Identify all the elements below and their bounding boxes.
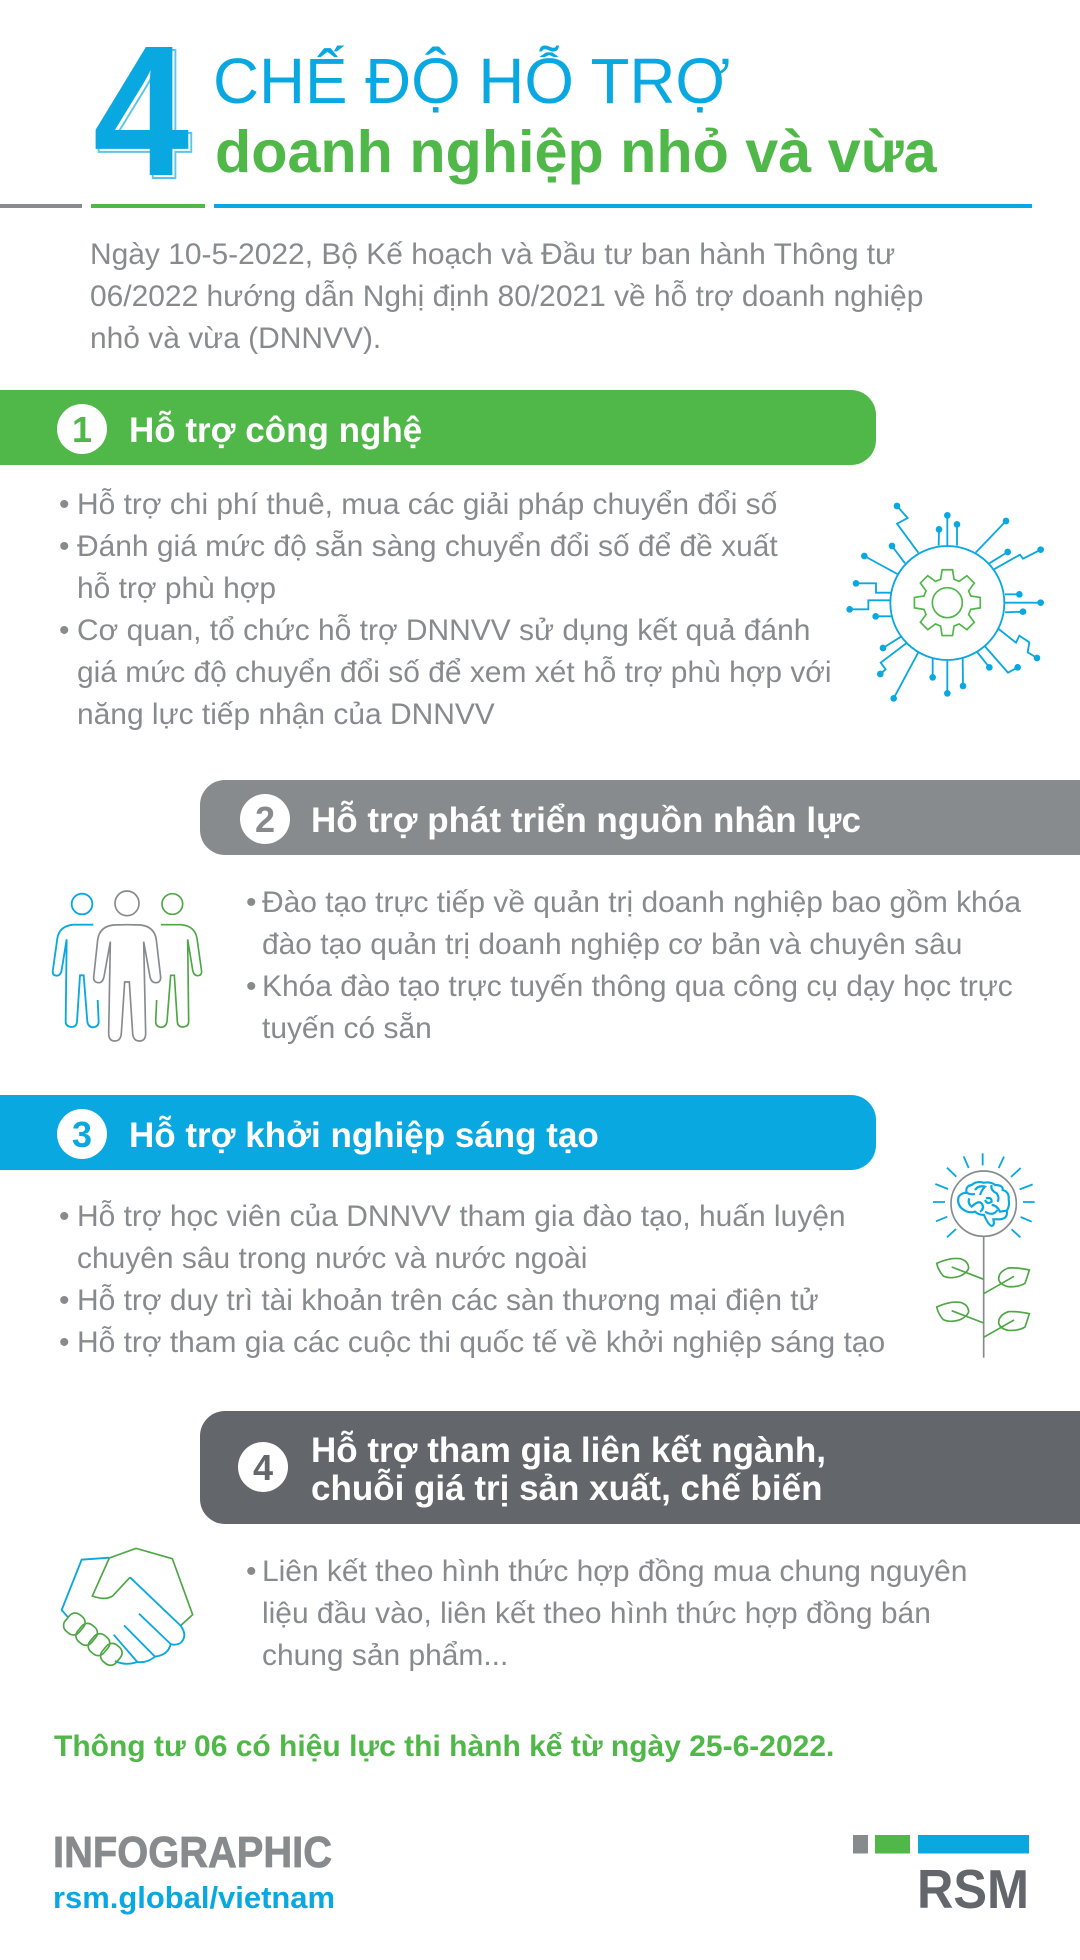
section 1 bullet list: năng lực tiếp nhận của DNNVV xyxy=(77,698,495,731)
icon: brain flower xyxy=(933,1153,1035,1358)
intro text: 06/2022 hướng dẫn Nghị định 80/2021 về hỗ trợ doanh nghiệp xyxy=(90,280,923,313)
section 3 bullet list: • xyxy=(59,1200,69,1233)
section 1 bullet list xyxy=(59,488,832,731)
section 2 bullet list: Khóa đào tạo trực tuyến thông qua công cụ dạy học trực xyxy=(262,970,1013,1003)
section 2 bullet list: • xyxy=(246,886,256,919)
intro text: Ngày 10-5-2022, Bộ Kế hoạch và Đầu tư ban hành Thông tư xyxy=(90,238,895,271)
panel: section 3 header xyxy=(0,1095,876,1170)
title: doanh nghiệp nhỏ và vừa xyxy=(215,118,938,185)
icon: handshake xyxy=(61,1548,193,1668)
footer: infographic label and website xyxy=(53,1828,335,1915)
section 2 bullet list: Đào tạo trực tiếp về quản trị doanh nghiệp bao gồm khóa xyxy=(262,886,1021,919)
header divider xyxy=(0,204,1032,208)
section 2 bullet list: tuyến có sẵn xyxy=(262,1012,432,1045)
panel: section 1 header: 1 xyxy=(72,409,92,450)
panel: section 4 header: 4 xyxy=(253,1447,273,1488)
panel: section 2 header: 2 xyxy=(255,799,275,840)
panel: section 4 header xyxy=(200,1411,1080,1524)
section 3 bullet list: chuyên sâu trong nước và nước ngoài xyxy=(77,1242,587,1275)
section 4 bullet list: chung sản phẩm... xyxy=(262,1639,508,1672)
section 3 bullet list: • xyxy=(59,1284,69,1317)
effective date note: Thông tư 06 có hiệu lực thi hành kể từ ngày 25-6-2022. xyxy=(54,1730,834,1763)
section 4 bullet list xyxy=(246,1555,967,1672)
intro text xyxy=(90,238,923,355)
intro text: nhỏ và vừa (DNNVV). xyxy=(90,322,381,355)
section 1 bullet list: hỗ trợ phù hợp xyxy=(77,572,276,605)
title: CHẾ ĐỘ HỖ TRỢ xyxy=(213,46,730,117)
section 1 bullet list: giá mức độ chuyển đổi số để xem xét hỗ trợ phù hợp với xyxy=(77,656,832,689)
section 2 bullet list: • xyxy=(246,970,256,1003)
section 1 bullet list: Hỗ trợ chi phí thuê, mua các giải pháp chuyển đổi số xyxy=(77,488,778,521)
footer: infographic label and website: rsm.global/vietnam xyxy=(53,1880,335,1915)
panel: section 3 header: Hỗ trợ khởi nghiệp sáng tạo xyxy=(129,1115,599,1155)
panel: section 3 header: 3 xyxy=(72,1114,92,1155)
big numeral 4: 4 xyxy=(96,10,192,218)
section 1 bullet list: Đánh giá mức độ sẵn sàng chuyển đổi số để đề xuất xyxy=(77,530,778,563)
section 3 bullet list: Hỗ trợ duy trì tài khoản trên các sàn thương mại điện tử xyxy=(77,1284,819,1317)
title xyxy=(213,46,938,185)
section 3 bullet list: • xyxy=(59,1326,69,1359)
section 2 bullet list: đào tạo quản trị doanh nghiệp cơ bản và chuyên sâu xyxy=(262,928,962,961)
icon: three people xyxy=(53,891,202,1041)
footer: infographic label and website: INFOGRAPHIC xyxy=(53,1828,332,1877)
panel: section 1 header: Hỗ trợ công nghệ xyxy=(129,410,422,450)
big numeral 4: 4 xyxy=(93,7,189,215)
panel: section 1 header xyxy=(0,390,876,465)
panel: section 4 header: chuỗi giá trị sản xuất, chế biến xyxy=(311,1468,822,1508)
logo: RSM xyxy=(853,1835,1029,1920)
section 4 bullet list: Liên kết theo hình thức hợp đồng mua chung nguyên xyxy=(262,1555,967,1588)
logo: RSM: RSM xyxy=(917,1858,1029,1920)
section 3 bullet list xyxy=(59,1200,885,1359)
section 1 bullet list: • xyxy=(59,530,69,563)
section 2 bullet list xyxy=(246,886,1021,1045)
panel: section 2 header xyxy=(200,780,1080,855)
panel: section 4 header: Hỗ trợ tham gia liên kết ngành, xyxy=(311,1430,826,1470)
section 3 bullet list: Hỗ trợ tham gia các cuộc thi quốc tế về khởi nghiệp sáng tạo xyxy=(77,1326,885,1359)
section 1 bullet list: • xyxy=(59,488,69,521)
section 1 bullet list: Cơ quan, tổ chức hỗ trợ DNNVV sử dụng kết quả đánh xyxy=(77,614,810,647)
panel: section 2 header: Hỗ trợ phát triển nguồn nhân lực xyxy=(311,800,861,840)
section 4 bullet list: liệu đầu vào, liên kết theo hình thức hợp đồng bán xyxy=(262,1597,931,1630)
section 1 bullet list: • xyxy=(59,614,69,647)
icon: technology gear circuit xyxy=(846,503,1044,702)
section 4 bullet list: • xyxy=(246,1555,256,1588)
section 3 bullet list: Hỗ trợ học viên của DNNVV tham gia đào tạo, huấn luyện xyxy=(77,1200,846,1233)
